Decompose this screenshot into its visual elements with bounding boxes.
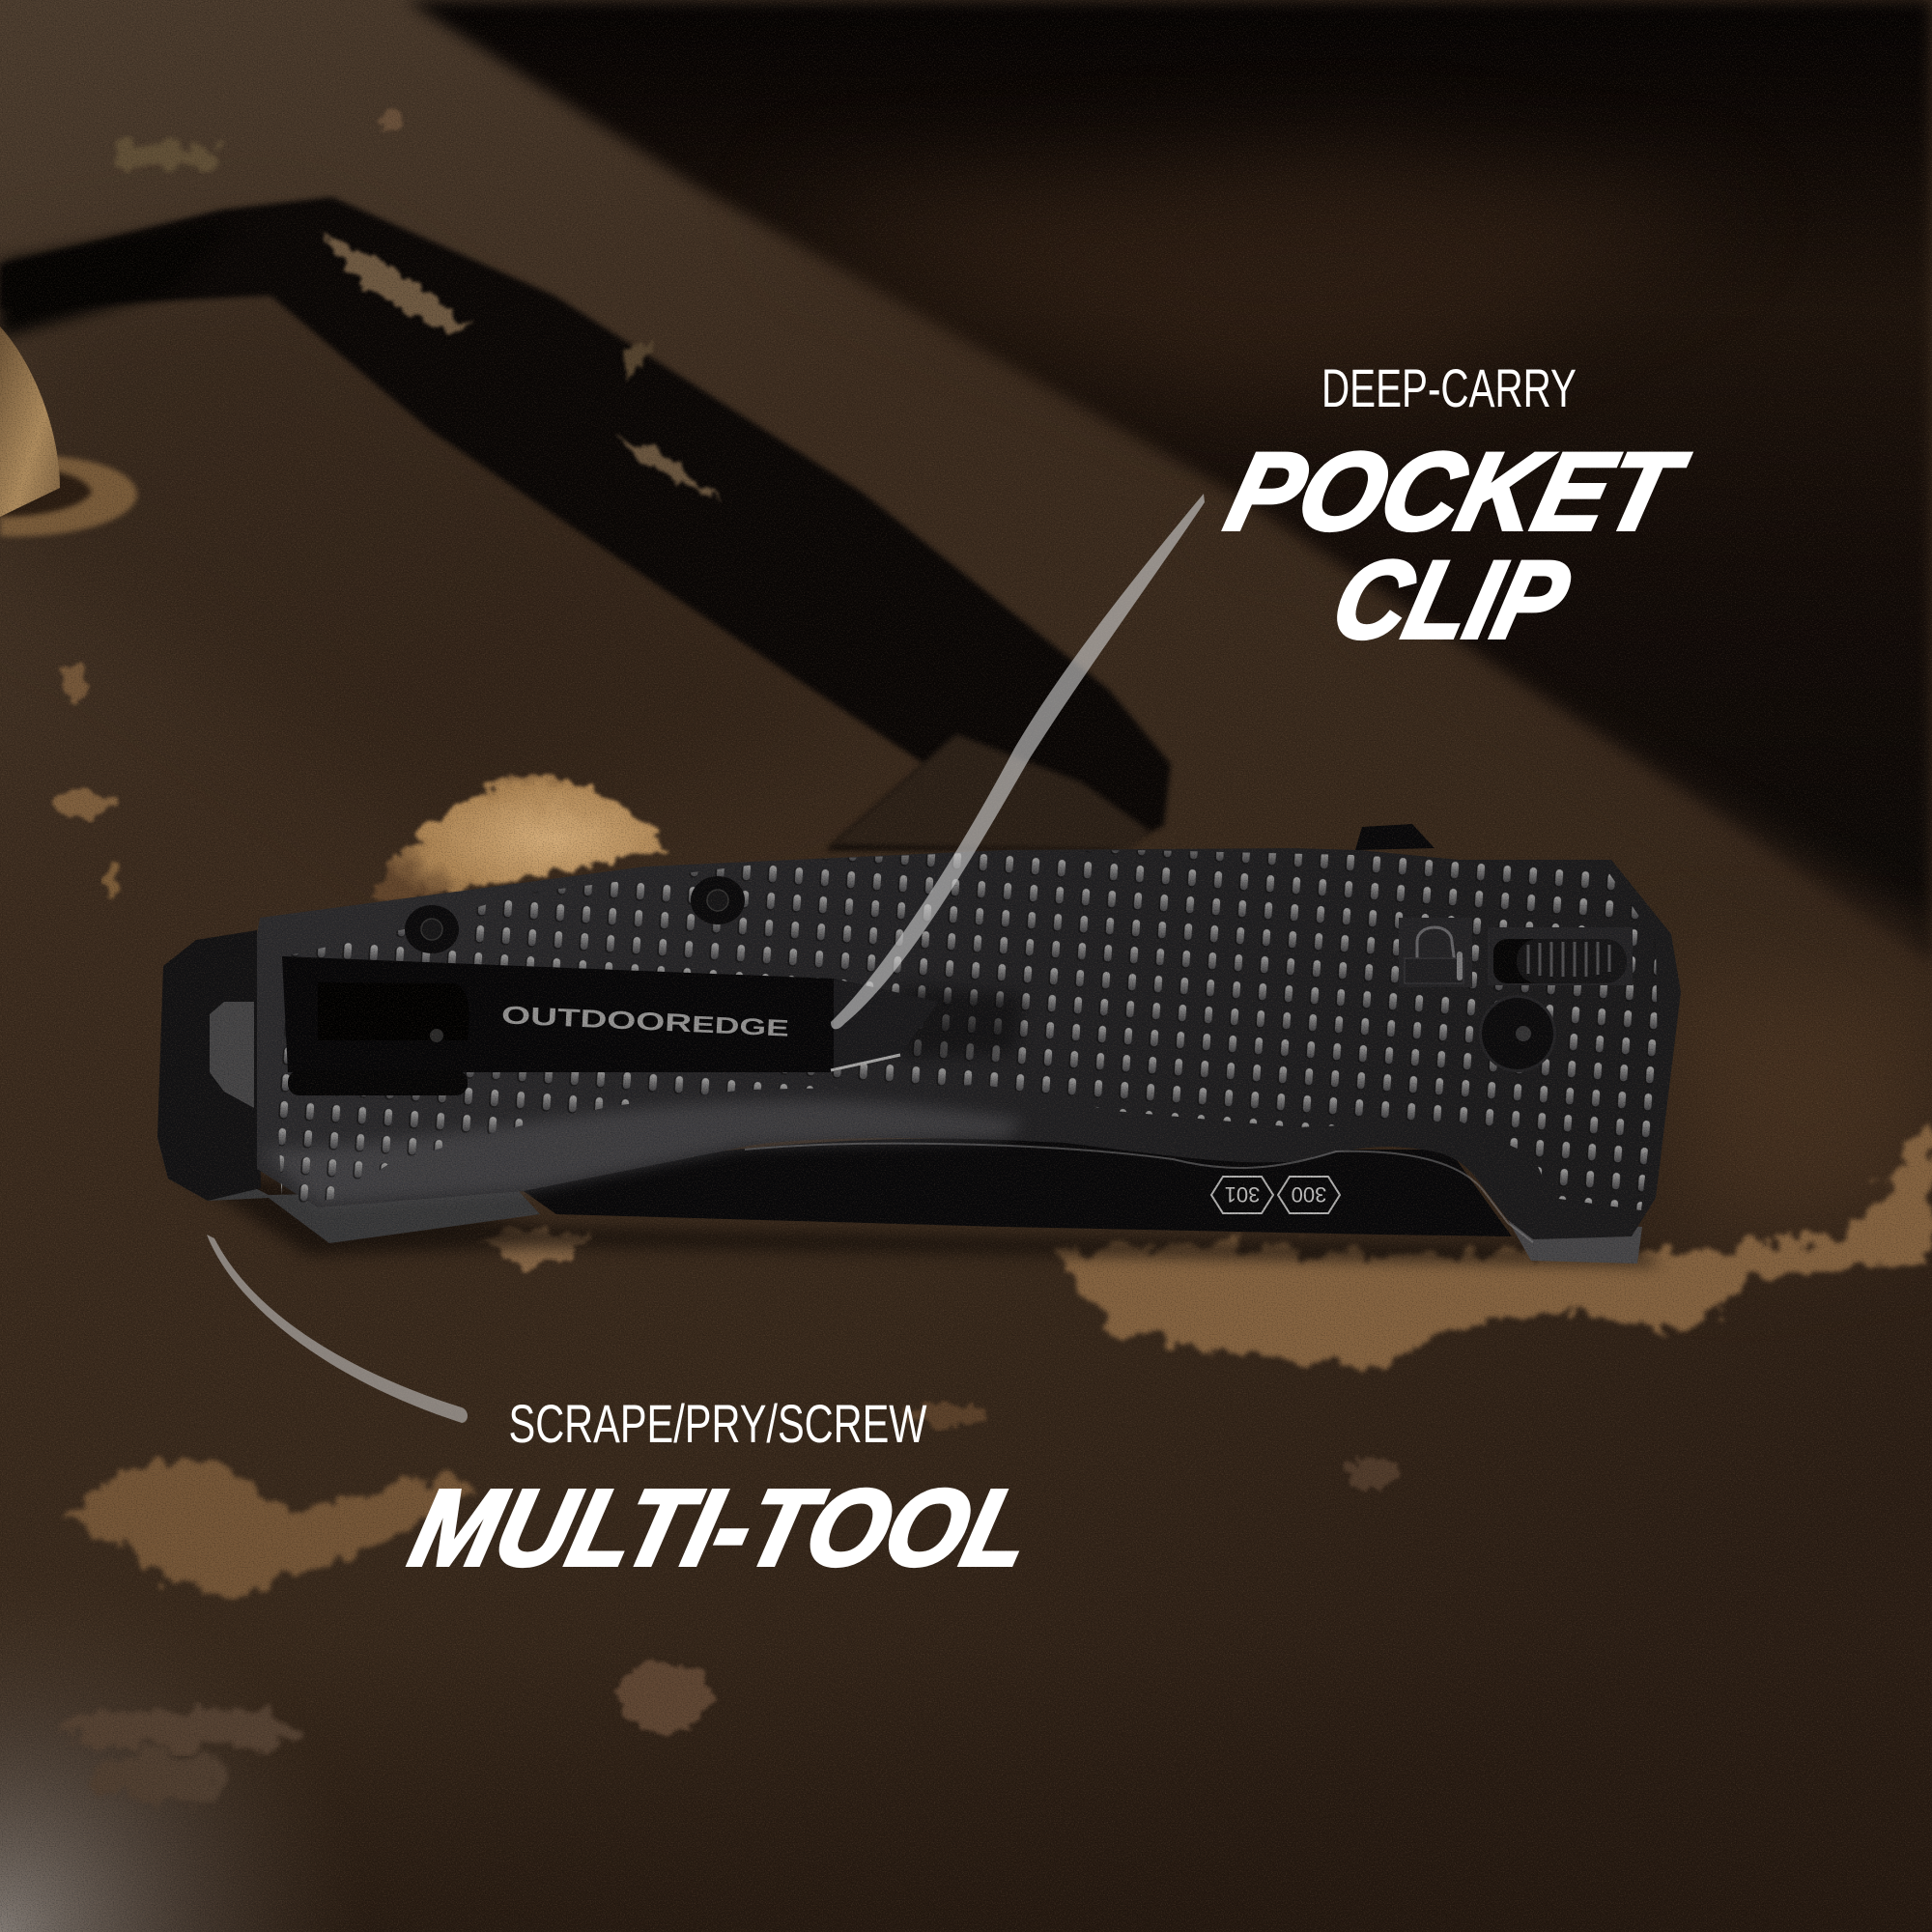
knife: tool window <box>210 1002 254 1108</box>
patch: spots left <box>62 662 89 700</box>
knife: steel badge 300: 300 <box>1292 1182 1326 1207</box>
background: glow right of knife <box>1662 966 1932 1246</box>
patch: round lower centre <box>618 1661 711 1730</box>
knife: clip lower tab <box>288 1070 468 1095</box>
knife: thumb stud <box>1355 824 1435 850</box>
patch: rust under knife <box>1047 1121 1932 1368</box>
knife: blade <box>524 1138 1512 1236</box>
knife: handle lower highlight <box>261 1100 1024 1206</box>
arrow: pocket clip callout <box>831 494 1205 1029</box>
heading: multi-tool: MULTI-TOOL <box>400 1468 1044 1589</box>
knife: blade spine line <box>745 1144 1533 1242</box>
heading: pocket clip <box>1216 430 1697 662</box>
knife: pocket clip body <box>282 956 939 1072</box>
label: deep-carry: DEEP-CARRY <box>1321 357 1577 418</box>
background: upper-left shadow <box>0 242 869 869</box>
knife: steel badge 301 <box>1211 1177 1273 1213</box>
knife: clip inner screw recess <box>318 982 469 1040</box>
knife: lower liner <box>157 1138 540 1243</box>
background: pale corner glow <box>0 1565 367 1932</box>
knife: steel badge 300 <box>1278 1177 1340 1213</box>
metal strap handle <box>0 197 1171 850</box>
knife: safety slider <box>1488 927 1633 985</box>
strap: left shadow <box>0 222 232 338</box>
knife: steel badge 301: 301 <box>1225 1182 1260 1207</box>
knife: grip texture <box>278 850 1658 1210</box>
patch: rust under blade tip <box>480 1229 594 1270</box>
strap: worn paint <box>319 232 473 333</box>
label: scrape pry screw: SCRAPE/PRY/SCREW <box>508 1393 927 1454</box>
knife: multi-tool end <box>157 930 261 1201</box>
heading: pocket clip: CLIP <box>1321 538 1580 662</box>
knife <box>157 824 1681 1265</box>
knife: pivot screw <box>1479 995 1556 1072</box>
knife: lock icon <box>1399 918 1472 987</box>
rock behind knife <box>372 775 671 903</box>
knife: pocket clip fade <box>900 985 1024 1058</box>
patch: faint spots <box>906 1404 987 1427</box>
knife: clip highlight <box>831 1055 900 1070</box>
arrow: multi-tool callout <box>207 1235 468 1423</box>
knife: ground shadow <box>164 1159 1662 1265</box>
knife: clip tip <box>834 979 939 1070</box>
strap: lit end <box>831 734 1150 850</box>
patch: rust lower left <box>58 1459 483 1591</box>
background: lid brown glow <box>773 155 1739 396</box>
knife: right liner <box>1508 1220 1642 1264</box>
knife: screw one <box>405 905 459 953</box>
knife: handle <box>257 848 1681 1239</box>
brass rivet <box>0 327 137 536</box>
background: dark lid area <box>406 0 1932 961</box>
background: bevel band <box>1169 522 1932 976</box>
knife: clip brand: OUTDOOR EDGE <box>501 1000 790 1042</box>
background: lower shade <box>0 1642 1932 1932</box>
heading: pocket clip: POCKET <box>1216 430 1697 554</box>
knife: screw two <box>691 876 745 924</box>
